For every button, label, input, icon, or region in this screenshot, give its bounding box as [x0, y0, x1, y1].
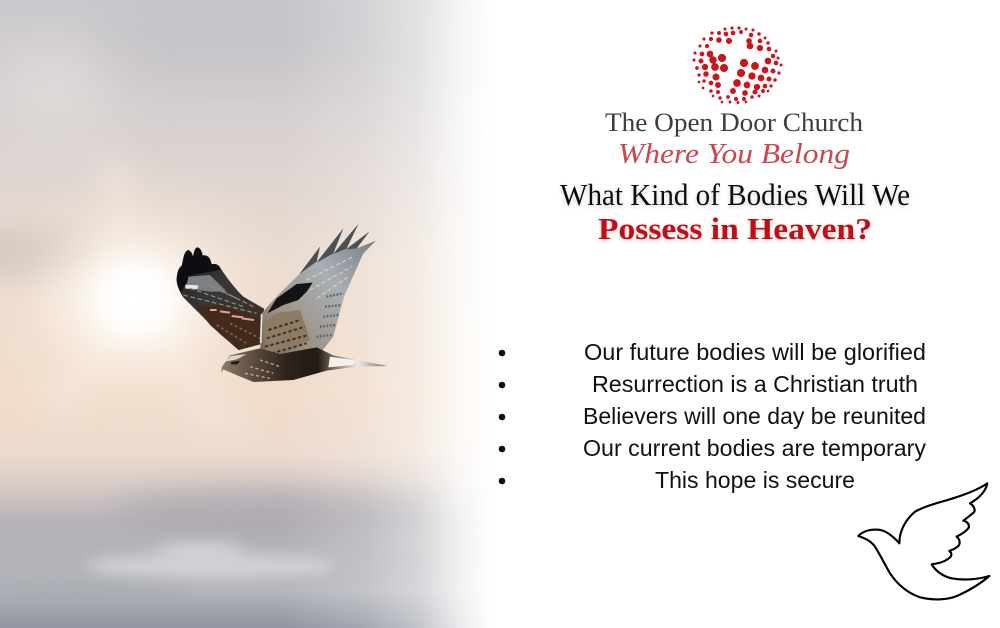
bullet 4: Our current bodies are temporary [583, 435, 926, 461]
church logo [605, 27, 863, 170]
icon: dotted globe with cross [693, 27, 782, 104]
hawk in flight [177, 224, 388, 382]
bullet 2: Resurrection is a Christian truth [592, 371, 918, 397]
right wing [260, 224, 376, 357]
title [560, 177, 910, 246]
bullet 1: Our future bodies will be glorified [584, 339, 926, 365]
bullet 5: This hope is secure [655, 467, 855, 493]
logo name: The Open Door Church [605, 108, 863, 137]
bullet 3: Believers will one day be reunited [583, 403, 926, 429]
icon: dove outline [858, 483, 989, 599]
bullet 5 [499, 467, 855, 493]
title line 1: What Kind of Bodies Will We [560, 177, 910, 212]
bullet list [499, 339, 926, 493]
body and tail [221, 347, 388, 382]
logo tagline: Where You Belong [618, 138, 850, 170]
title line 2: Possess in Heaven? [598, 211, 872, 246]
left wing [177, 247, 264, 350]
sky photo background [0, 0, 492, 628]
